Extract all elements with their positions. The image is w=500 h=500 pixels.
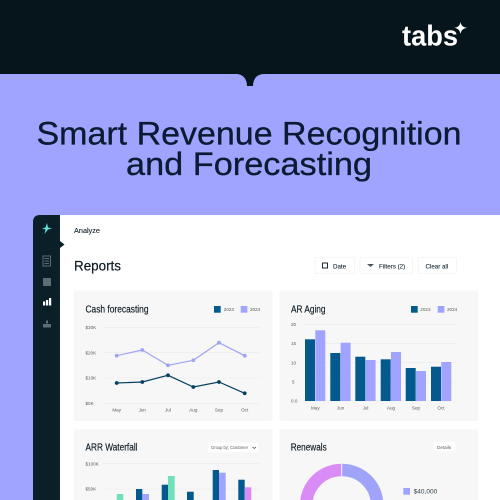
bar chart: 5 (292, 380, 295, 385)
donut chart (306, 470, 377, 500)
line chart: Sep (215, 408, 224, 412)
group dropdown: Group by: Customer (211, 445, 248, 450)
line chart (86, 325, 260, 412)
details button (434, 442, 455, 451)
dashboard panel (33, 215, 500, 500)
filters button: Filters (2) (379, 263, 405, 270)
heading: Cash forecasting (86, 304, 148, 315)
sidebar (33, 215, 64, 500)
icon: tray (43, 320, 51, 328)
line chart: Jun (139, 408, 146, 412)
line chart: $0K (86, 401, 95, 406)
bar chart (86, 461, 260, 500)
bar chart: $50K (86, 487, 97, 492)
bar chart: May (311, 406, 320, 410)
icon: spark (42, 223, 52, 234)
legend (403, 488, 438, 496)
bar chart: 15 (291, 341, 297, 346)
bar chart: 20 (291, 322, 297, 327)
breadcrumb: Analyze (74, 228, 100, 235)
filters button (360, 258, 412, 274)
bar chart: $100K (86, 461, 100, 466)
legend (214, 306, 261, 313)
legend: 2024 (447, 307, 458, 312)
date button (315, 258, 354, 274)
bar chart: Sep (412, 406, 421, 410)
header band (0, 0, 500, 86)
bar chart: Aug (387, 406, 396, 410)
bar chart (291, 322, 457, 410)
title: Smart Revenue Recognition (36, 116, 461, 152)
group dropdown (208, 443, 258, 452)
bar chart: Jul (363, 406, 368, 410)
line chart: May (112, 408, 122, 412)
clear all button (418, 258, 456, 274)
title: and Forecasting (126, 146, 372, 182)
panel: AR aging (280, 290, 478, 421)
bar chart: 10 (291, 360, 297, 365)
line chart: $10K (86, 376, 97, 381)
legend: $40,000 (414, 489, 438, 496)
bar chart: Oct (437, 406, 445, 410)
legend: 2023 (420, 307, 431, 312)
line chart: Aug (189, 408, 198, 412)
bar chart: Jun (337, 406, 345, 410)
logo: tabs: tabs (402, 21, 458, 53)
line chart: $20K (86, 350, 97, 355)
legend: 2024 (250, 307, 261, 312)
heading: ARR Waterfall (86, 442, 138, 454)
icon: bar chart (43, 298, 51, 306)
date button: Date (333, 263, 347, 270)
clear all button: Clear all (426, 263, 448, 270)
title (36, 116, 461, 182)
details button: Details (437, 445, 452, 450)
heading: AR Aging (291, 304, 326, 315)
icon: document (43, 256, 50, 266)
line chart: $30K (86, 325, 97, 330)
legend (411, 306, 458, 313)
icon: calendar (43, 278, 51, 286)
heading: Renewals (291, 442, 327, 453)
legend: 2023 (224, 307, 234, 312)
bar chart: 0.0 (291, 399, 298, 404)
line chart: Jul (165, 408, 171, 412)
panel: renewals (280, 429, 478, 500)
panel: cash forecasting (74, 290, 272, 421)
page heading: Reports (74, 258, 121, 274)
panel: ARR waterfall (74, 429, 272, 500)
line chart: Oct (241, 408, 249, 412)
